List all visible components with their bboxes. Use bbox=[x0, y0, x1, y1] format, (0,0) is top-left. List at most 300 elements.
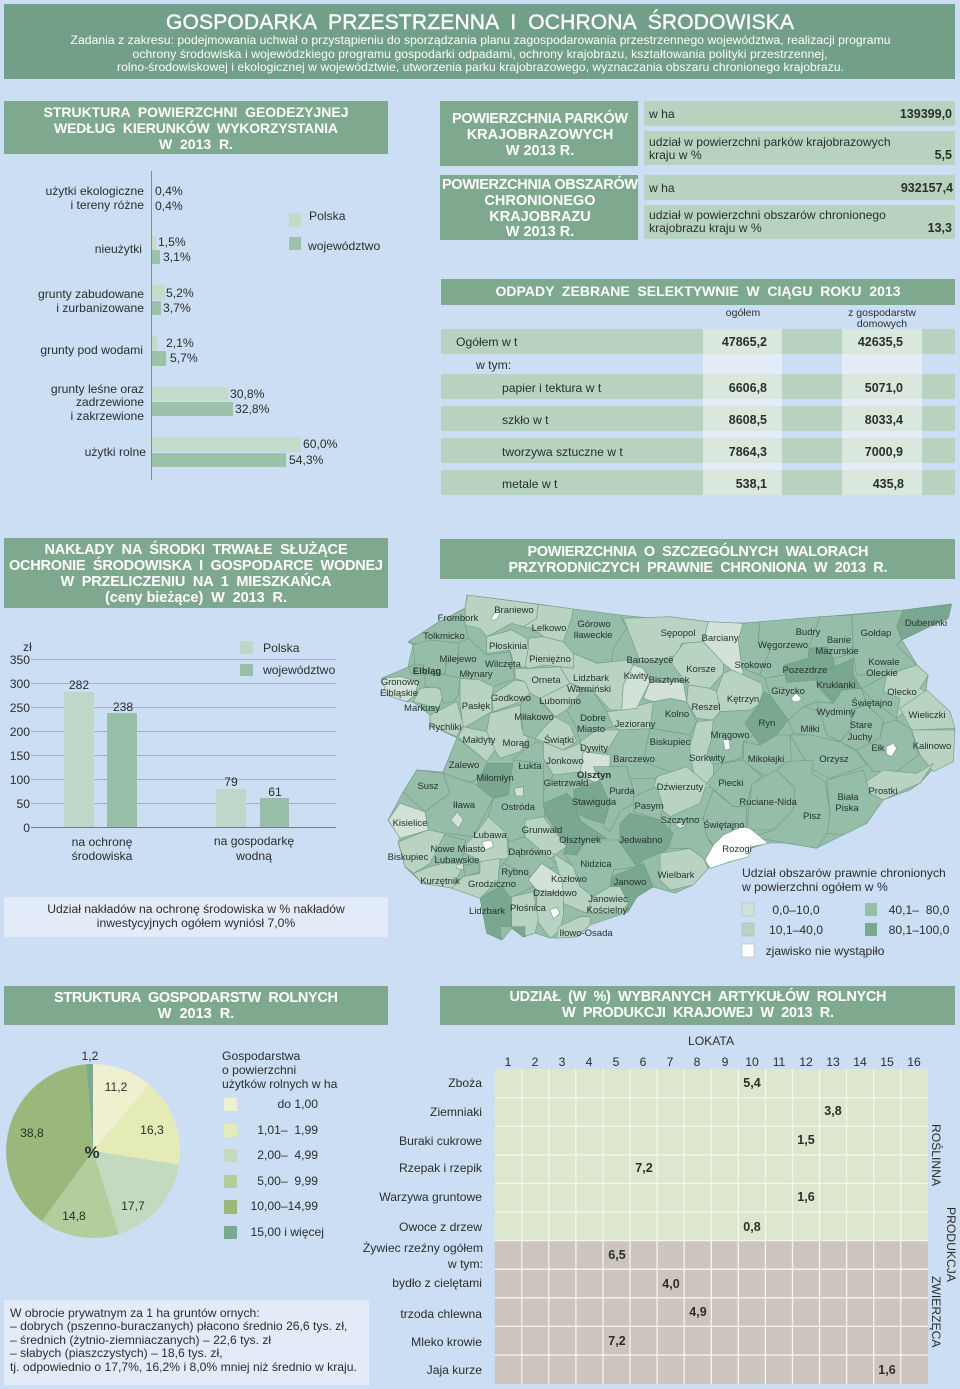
bar chart: outlays per capita: na gospodarkę bbox=[214, 834, 294, 848]
panel: selective waste table: 47865,2 bbox=[722, 335, 767, 349]
panel: landscape parks: w ha bbox=[648, 107, 675, 121]
map place names: Oleckie bbox=[866, 668, 898, 679]
table: rank grid: Warzywa gruntowe bbox=[379, 1190, 482, 1204]
legend: farm sizes: 15,00 i więcej bbox=[250, 1225, 324, 1239]
callout: outlays share: Udział nakładów na ochronę środowiska w % nakładów bbox=[47, 902, 345, 916]
panel: protected landscape areas: 932157,4 bbox=[901, 181, 953, 195]
map place names: Górowo bbox=[577, 619, 611, 630]
bar chart: outlays per capita bbox=[10, 640, 336, 863]
pie chart: farm sizes bbox=[6, 1049, 180, 1238]
table: rank grid: Mleko krowie bbox=[411, 1335, 482, 1349]
map place names: Miłakowo bbox=[514, 712, 554, 723]
map place names: Zalewo bbox=[449, 760, 479, 771]
legend: outlays bbox=[240, 641, 335, 677]
map place names: Grodziczno bbox=[468, 879, 516, 890]
map place names: Giżycko bbox=[771, 686, 805, 697]
map place names: Lidzbark bbox=[469, 906, 505, 917]
intro text bbox=[70, 33, 890, 74]
map place names: Kowale bbox=[868, 657, 900, 668]
bar chart: land structure: i zurbanizowane bbox=[56, 301, 144, 315]
table: rank grid: 13 bbox=[826, 1055, 840, 1069]
legend: farm sizes bbox=[222, 1049, 338, 1239]
panel: selective waste table: Ogółem w t bbox=[456, 335, 518, 349]
legend: protected area share: 10,1–40,0 bbox=[769, 923, 823, 937]
heading: investment outlays: OCHRONIE ŚRODOWISKA I GOSPODARCE WODNEJ bbox=[9, 556, 383, 574]
map place names: Rozogi bbox=[722, 844, 752, 855]
axis label: plant production: ROŚLINNA bbox=[929, 1124, 944, 1187]
map place names: Łukta bbox=[518, 761, 542, 772]
heading: land structure: WEDŁUG KIERUNKÓW WYKORZYSTANIA bbox=[54, 119, 338, 136]
panel: selective waste table: 42635,5 bbox=[858, 335, 903, 349]
map place names: Stawiguda bbox=[572, 797, 617, 808]
map place names: Janowo bbox=[614, 877, 646, 888]
map place names: Dywity bbox=[580, 743, 608, 754]
map place names: Lubawskie bbox=[435, 855, 479, 866]
callout: land prices bbox=[4, 1300, 369, 1385]
map place names: Olsztyn bbox=[577, 770, 611, 781]
table: rank grid: Jaja kurze bbox=[427, 1363, 482, 1377]
panel: selective waste table: tworzywa sztuczne w t bbox=[502, 445, 623, 459]
heading: share of agricultural products: UDZIAŁ (W %) WYBRANYCH ARTYKUŁÓW ROLNYCH bbox=[510, 987, 886, 1005]
map place names: Elbląg bbox=[413, 666, 441, 677]
map place names: Kętrzyn bbox=[727, 694, 759, 705]
map place names: Wieliczki bbox=[909, 710, 945, 721]
heading: land structure: STRUKTURA POWIERZCHNI GEODEZYJNEJ bbox=[44, 104, 348, 120]
heading: share of agricultural products bbox=[440, 986, 955, 1025]
bar chart: outlays per capita: wodną bbox=[235, 849, 272, 863]
map place names: Rybno bbox=[501, 867, 529, 878]
map place names: Janowiec bbox=[588, 894, 628, 905]
bar chart: land structure: użytki rolne bbox=[85, 445, 146, 459]
heading: protected areas map bbox=[440, 539, 955, 579]
table: rank grid: 0,8 bbox=[743, 1220, 761, 1234]
legend: land structure bbox=[289, 209, 380, 253]
table: rank grid: 5 bbox=[613, 1055, 620, 1069]
panel: selective waste table: z gospodarstw bbox=[848, 307, 916, 319]
map place names: Mikołajki bbox=[748, 754, 784, 765]
map place names: Jonkowo bbox=[546, 756, 584, 767]
choropleth map bbox=[380, 595, 955, 940]
map place names: Działdowo bbox=[533, 888, 577, 899]
panel: protected landscape areas: 13,3 bbox=[928, 221, 952, 235]
panel: selective waste table bbox=[441, 279, 955, 495]
table: rank grid: 2 bbox=[532, 1055, 539, 1069]
table: rank grid: 15 bbox=[880, 1055, 894, 1069]
heading: farm structure bbox=[4, 986, 388, 1025]
map place names: Dźwierzuty bbox=[657, 782, 703, 793]
panel: selective waste table: 8033,4 bbox=[865, 413, 903, 427]
heading: farm structure: W 2013 R. bbox=[158, 1006, 234, 1022]
panel: landscape parks bbox=[440, 101, 955, 166]
table: rank grid: w tym: bbox=[447, 1257, 483, 1271]
table: rank grid: 4 bbox=[586, 1055, 593, 1069]
panel: selective waste table: ODPADY ZEBRANE SELEKTYWNIE W CIĄGU ROKU 2013 bbox=[496, 283, 901, 299]
bar chart: outlays per capita: 100 bbox=[10, 773, 30, 787]
map place names: Ostróda bbox=[501, 802, 536, 813]
panel: protected landscape areas: udział w powierzchni obszarów chronionego bbox=[649, 208, 886, 222]
panel: landscape parks: 139399,0 bbox=[900, 107, 952, 121]
heading: protected areas map: PRZYRODNICZYCH PRAWNIE CHRONIONA W 2013 R. bbox=[508, 560, 888, 576]
map place names: Płośnica bbox=[510, 903, 547, 914]
map place names: Susz bbox=[417, 781, 439, 792]
table: rank grid: 6,5 bbox=[608, 1248, 626, 1262]
bar chart: land structure: grunty pod wodami bbox=[40, 343, 143, 357]
map place names: Kruklanki bbox=[816, 680, 856, 691]
panel: selective waste table: ogółem bbox=[726, 307, 760, 319]
map place names: Milejewo bbox=[440, 654, 476, 665]
panel: selective waste table: 8608,5 bbox=[729, 413, 767, 427]
panel: selective waste table: w tym: bbox=[475, 358, 511, 372]
table: rank grid: Buraki cukrowe bbox=[399, 1134, 482, 1148]
panel: landscape parks: 5,5 bbox=[935, 148, 952, 162]
table: rank grid: 16 bbox=[907, 1055, 921, 1069]
heading: farm structure: STRUKTURA GOSPODARSTW ROLNYCH bbox=[54, 990, 338, 1006]
table: rank grid: Rzepak i rzepik bbox=[399, 1161, 483, 1175]
bar chart: outlays per capita: 0 bbox=[23, 821, 30, 835]
map place names: Stare bbox=[850, 720, 872, 731]
map place names: Pozezdrze bbox=[783, 665, 827, 676]
map place names: Dobre bbox=[580, 713, 606, 724]
panel: selective waste table: 7864,3 bbox=[729, 445, 767, 459]
map place names: Dąbrówno bbox=[508, 847, 552, 858]
callout: outlays share: inwestycyjnych ogółem wyniósł 7,0% bbox=[97, 916, 295, 930]
table: rank grid: LOKATA bbox=[688, 1034, 735, 1048]
map place names: Jeziorany bbox=[615, 719, 656, 730]
bar chart: land structure: 5,2% bbox=[166, 286, 194, 300]
bar chart: land structure: 5,7% bbox=[170, 351, 198, 365]
intro text: ochrony środowiska i wojewódzkiego programu gospodarki odpadami, ochrony krajobrazu, kształtowania polityki przestrzennej, bbox=[132, 47, 828, 61]
callout: land prices: W obrocie prywatnym za 1 ha gruntów ornych: bbox=[10, 1306, 260, 1320]
panel: selective waste table: szkło w t bbox=[502, 413, 549, 427]
table: rank grid: 1,6 bbox=[797, 1190, 815, 1204]
map place names: Sorkwity bbox=[689, 753, 725, 764]
title banner bbox=[4, 4, 955, 79]
panel: protected landscape areas: krajobrazu kraju w % bbox=[649, 221, 762, 235]
legend: protected area share bbox=[741, 866, 950, 958]
legend: protected area share: w powierzchni ogółem w % bbox=[741, 880, 888, 894]
panel: selective waste table: 435,8 bbox=[873, 477, 904, 491]
table: rank grid: Ziemniaki bbox=[430, 1105, 482, 1119]
legend: protected area share: 80,1–100,0 bbox=[889, 923, 950, 937]
legend: farm sizes: Gospodarstwa bbox=[222, 1049, 301, 1063]
map place names: Nidzica bbox=[580, 859, 612, 870]
axis label: production: PRODUKCJA bbox=[944, 1207, 958, 1283]
title: GOSPODARKA PRZESTRZENNA I OCHRONA ŚRODOWISKA bbox=[166, 10, 794, 34]
panel: selective waste table: 7000,9 bbox=[865, 445, 903, 459]
panel: protected landscape areas: POWIERZCHNIA OBSZARÓW bbox=[442, 175, 638, 193]
legend: protected area share: Udział obszarów prawnie chronionych bbox=[742, 866, 946, 880]
bar chart: outlays per capita: 61 bbox=[268, 785, 282, 799]
map place names: Budry bbox=[796, 627, 821, 638]
map place names: Purda bbox=[609, 786, 635, 797]
map place names: Tolkmicko bbox=[423, 631, 465, 642]
legend: land structure: Polska bbox=[309, 209, 346, 223]
map place names: Reszel bbox=[691, 702, 721, 713]
pie chart: farm sizes: 38,8 bbox=[20, 1126, 44, 1140]
map place names: Miłomłyn bbox=[476, 773, 514, 784]
panel: selective waste table: 538,1 bbox=[736, 477, 767, 491]
table: rank grid: 7 bbox=[667, 1055, 674, 1069]
map place names: Barczewo bbox=[613, 754, 655, 765]
panel: protected landscape areas: w ha bbox=[648, 181, 675, 195]
bar chart: outlays per capita: 150 bbox=[10, 749, 30, 763]
pie chart: farm sizes: 14,8 bbox=[62, 1209, 86, 1223]
table: rank grid: 12 bbox=[799, 1055, 813, 1069]
map place names: Młynary bbox=[459, 669, 493, 680]
map place names: Lelkowo bbox=[532, 623, 566, 634]
table: rank grid: 1 bbox=[505, 1055, 512, 1069]
pie chart: farm sizes: 1,2 bbox=[82, 1049, 99, 1063]
panel: landscape parks: KRAJOBRAZOWYCH bbox=[467, 127, 613, 143]
map place names: Kościelny bbox=[587, 905, 628, 916]
map place names: Iława bbox=[453, 800, 476, 811]
map place names: Olecko bbox=[887, 687, 917, 698]
map place names bbox=[380, 605, 951, 939]
map place names: Świętajno bbox=[703, 819, 745, 831]
heading: investment outlays bbox=[4, 538, 388, 608]
axis label: animal production: ZWIERZĘCA bbox=[929, 1276, 943, 1348]
heading: land structure: W 2013 R. bbox=[159, 136, 233, 152]
bar chart: land structure: i tereny różne bbox=[70, 198, 144, 212]
intro text: rolno-środowiskowej i ekologicznej w województwie, utworzenia parku krajobrazowego, wyznaczania obszaru chronionego krajobrazu. bbox=[117, 60, 844, 74]
map place names: Piska bbox=[835, 803, 859, 814]
legend: farm sizes: 5,00– 9,99 bbox=[257, 1174, 318, 1188]
map place names: Mazurskie bbox=[815, 646, 859, 657]
map place names: Korsze bbox=[686, 664, 716, 675]
pie chart: farm sizes: 11,2 bbox=[105, 1080, 128, 1094]
bar chart: land structure: i zakrzewione bbox=[70, 409, 144, 423]
map place names: Gronowo bbox=[381, 677, 419, 688]
map place names: Lidzbark bbox=[573, 673, 609, 684]
bar chart: land structure: grunty zabudowane bbox=[38, 287, 144, 301]
map place names: Biskupiec bbox=[650, 737, 691, 748]
map place names: Świętajno bbox=[851, 697, 893, 709]
legend: farm sizes: 1,01– 1,99 bbox=[257, 1123, 318, 1137]
bar chart: land structure: 0,4% bbox=[155, 199, 183, 213]
panel: protected landscape areas: W 2013 R. bbox=[506, 224, 574, 240]
map place names: Kiwity bbox=[624, 671, 649, 682]
map place names: Kolno bbox=[665, 709, 689, 720]
legend: outlays: Polska bbox=[263, 641, 300, 655]
table: rank grid: 4,0 bbox=[662, 1277, 680, 1291]
bar chart: outlays per capita: 250 bbox=[10, 701, 30, 715]
map place names: Godkowo bbox=[491, 693, 531, 704]
bar chart: outlays per capita: na ochronę bbox=[72, 835, 133, 849]
heading: share of agricultural products: W PRODUKCJI KRAJOWEJ W 2013 R. bbox=[562, 1005, 834, 1021]
legend: protected area share: zjawisko nie wystąpiło bbox=[766, 944, 885, 958]
table: rank grid: 4,9 bbox=[689, 1305, 707, 1319]
map place names: Elbląskie bbox=[380, 688, 418, 699]
bar chart: land structure: nieużytki bbox=[95, 242, 142, 256]
bar chart: outlays per capita: 79 bbox=[224, 775, 238, 789]
map place names: Ełk bbox=[871, 743, 885, 754]
table: rank grid bbox=[363, 1034, 928, 1384]
table: rank grid: 11 bbox=[773, 1055, 786, 1069]
panel: selective waste table: 5071,0 bbox=[865, 381, 903, 395]
heading: investment outlays: W PRZELICZENIU NA 1 MIESZKAŃCA bbox=[60, 573, 332, 590]
map place names: Orneta bbox=[531, 675, 561, 686]
map place names: Sępopol bbox=[661, 628, 695, 639]
map place names: Pasym bbox=[634, 801, 664, 812]
map place names: Piecki bbox=[718, 778, 744, 789]
bar chart: land structure: 54,3% bbox=[289, 453, 324, 467]
table: rank grid: Zboża bbox=[448, 1076, 482, 1090]
table: rank grid: 9 bbox=[722, 1055, 729, 1069]
map place names: Iłowo-Osada bbox=[559, 928, 613, 939]
heading: investment outlays: NAKŁADY NA ŚRODKI TRWAŁE SŁUŻĄCE bbox=[44, 540, 348, 558]
panel: landscape parks: W 2013 R. bbox=[506, 143, 574, 159]
map place names: Iławeckie bbox=[573, 630, 613, 641]
table: rank grid: 8 bbox=[694, 1055, 701, 1069]
callout: land prices: – słabych (piaszczystych) – 18,6 tys. zł, bbox=[10, 1346, 223, 1360]
map place names: Kisielice bbox=[393, 818, 427, 829]
map place names: Ruciane-Nida bbox=[739, 797, 797, 808]
table: rank grid: 10 bbox=[745, 1055, 759, 1069]
map place names: Morąg bbox=[503, 738, 529, 749]
map place names: Lubomino bbox=[539, 696, 581, 707]
heading: protected areas map: POWIERZCHNIA O SZCZEGÓLNYCH WALORACH bbox=[528, 542, 868, 560]
map place names: Braniewo bbox=[494, 605, 534, 616]
legend: farm sizes: 10,00–14,99 bbox=[250, 1199, 318, 1213]
map place names: Frombork bbox=[438, 613, 479, 624]
table: rank grid: 3,8 bbox=[824, 1104, 842, 1118]
map place names: Gołdap bbox=[861, 628, 891, 639]
map place names: Barciany bbox=[702, 633, 739, 644]
legend: farm sizes: 2,00– 4,99 bbox=[257, 1148, 318, 1162]
bar chart: land structure: grunty leśne oraz bbox=[51, 382, 144, 396]
table: rank grid: trzoda chlewna bbox=[400, 1307, 482, 1321]
map place names: Świątki bbox=[544, 734, 574, 746]
map place names: Srokowo bbox=[735, 660, 771, 671]
bar chart: outlays per capita: 350 bbox=[10, 653, 30, 667]
map place names: Szczytno bbox=[661, 815, 699, 826]
map place names: Pasłęk bbox=[462, 701, 491, 712]
panel: protected landscape areas: CHRONIONEGO bbox=[484, 193, 596, 209]
map place names: Biskupiec bbox=[388, 852, 429, 863]
map place names: Dubeninki bbox=[905, 618, 947, 629]
bar chart: land structure: 3,7% bbox=[163, 301, 191, 315]
table: rank grid: 7,2 bbox=[608, 1334, 626, 1348]
legend: protected area share: 0,0–10,0 bbox=[772, 903, 820, 917]
callout: land prices: – średnich (żytnio-ziemniaczanych) – 22,6 tys. zł bbox=[10, 1333, 271, 1347]
panel: landscape parks: udział w powierzchni parków krajobrazowych bbox=[649, 135, 891, 149]
map place names: Miłki bbox=[800, 724, 820, 735]
table: rank grid: bydło z cielętami bbox=[392, 1276, 482, 1290]
map place names: Płoskinia bbox=[489, 641, 528, 652]
map place names: Pisz bbox=[803, 811, 821, 822]
heading: investment outlays: (ceny bieżące) W 2013 R. bbox=[105, 590, 287, 606]
map place names: Rychliki bbox=[429, 722, 461, 733]
table: rank grid: Owoce z drzew bbox=[399, 1220, 482, 1234]
bar chart: land structure: użytki ekologiczne bbox=[45, 184, 144, 198]
map place names: Mrągowo bbox=[710, 730, 750, 741]
map place names: Miasto bbox=[577, 724, 605, 735]
bar chart: outlays per capita: 238 bbox=[113, 700, 133, 714]
map place names: Pieniężno bbox=[529, 654, 571, 665]
map place names: Węgorzewo bbox=[758, 640, 808, 651]
map place names: Kurzętnik bbox=[420, 876, 460, 887]
map place names: Kozłowo bbox=[551, 874, 587, 885]
legend: farm sizes: do 1,00 bbox=[277, 1097, 318, 1111]
map place names: Bisztynek bbox=[649, 675, 690, 686]
map place names: Jedwabno bbox=[619, 835, 663, 846]
panel: protected landscape areas bbox=[440, 175, 955, 240]
callout: outlays share bbox=[4, 897, 388, 937]
map place names: Warmiński bbox=[567, 684, 611, 695]
legend: protected area share: 40,1– 80,0 bbox=[889, 903, 950, 917]
map place names: Nowe Miasto bbox=[431, 844, 485, 855]
bar chart: outlays per capita: 282 bbox=[69, 678, 89, 692]
bar chart: outlays per capita: środowiska bbox=[72, 849, 133, 863]
callout: land prices: – dobrych (pszenno-buraczanych) płacono średnio 26,6 tys. zł, bbox=[10, 1319, 347, 1333]
map place names: Gietrzwałd bbox=[544, 778, 588, 789]
pie chart: farm sizes: % bbox=[84, 1143, 100, 1162]
map place names: Lubawa bbox=[473, 830, 507, 841]
map place names: Orzysz bbox=[819, 754, 849, 765]
map place names: Juchy bbox=[848, 732, 873, 743]
bar chart: land structure: zadrzewione bbox=[76, 395, 144, 409]
map place names: Wydminy bbox=[817, 707, 856, 718]
map place names: Małdyty bbox=[463, 735, 496, 746]
map place names: Olsztynek bbox=[559, 835, 601, 846]
bar chart: outlays per capita: zł bbox=[23, 640, 32, 654]
bar chart: land structure: 3,1% bbox=[163, 250, 191, 264]
intro text: Zadania z zakresu: podejmowania uchwał o przystąpieniu do sporządzania planu zagospodarowania przestrzennego województwa, realizacji programu bbox=[70, 33, 890, 47]
table: rank grid: 5,4 bbox=[743, 1076, 761, 1090]
callout: land prices: tj. odpowiednio o 17,7%, 16,2% i 8,0% mniej niż średnio w kraju. bbox=[10, 1360, 357, 1374]
pie chart: farm sizes: 16,3 bbox=[140, 1123, 164, 1137]
legend: farm sizes: użytków rolnych w ha bbox=[222, 1077, 338, 1091]
panel: selective waste table: papier i tektura w t bbox=[502, 381, 602, 395]
heading: land structure bbox=[4, 101, 388, 154]
legend: land structure: województwo bbox=[307, 239, 380, 253]
legend: outlays: województwo bbox=[262, 663, 335, 677]
pie chart: farm sizes: 17,7 bbox=[121, 1199, 145, 1213]
bar chart: land structure bbox=[38, 171, 338, 480]
table: rank grid: 1,6 bbox=[878, 1363, 896, 1377]
bar chart: land structure: 1,5% bbox=[158, 235, 186, 249]
legend: farm sizes: o powierzchni bbox=[222, 1063, 296, 1077]
panel: landscape parks: kraju w % bbox=[649, 148, 702, 162]
map place names: Kalinowo bbox=[913, 741, 951, 752]
table: rank grid: 14 bbox=[853, 1055, 867, 1069]
table: rank grid: 6 bbox=[640, 1055, 647, 1069]
map place names: Markusy bbox=[404, 703, 440, 714]
bar chart: outlays per capita: 300 bbox=[10, 677, 30, 691]
panel: selective waste table: metale w t bbox=[502, 477, 558, 491]
bar chart: land structure: 2,1% bbox=[166, 336, 194, 350]
map place names: Banie bbox=[827, 635, 851, 646]
map place names: Biała bbox=[837, 792, 859, 803]
panel: selective waste table: 6606,8 bbox=[729, 381, 767, 395]
map place names: Wielbark bbox=[658, 870, 695, 881]
bar chart: land structure: 0,4% bbox=[155, 184, 183, 198]
table: rank grid: Żywiec rzeźny ogółem bbox=[363, 1241, 483, 1255]
map place names: Bartoszyce bbox=[626, 655, 674, 666]
table: rank grid: 3 bbox=[559, 1055, 566, 1069]
panel: selective waste table: domowych bbox=[857, 318, 907, 330]
map place names: Prostki bbox=[868, 786, 898, 797]
table: rank grid: 1,5 bbox=[797, 1133, 815, 1147]
bar chart: land structure: 30,8% bbox=[230, 387, 265, 401]
bar chart: outlays per capita: 50 bbox=[16, 797, 30, 811]
map place names: Wilczęta bbox=[485, 659, 522, 670]
bar chart: land structure: 32,8% bbox=[235, 402, 270, 416]
map place names: Grunwald bbox=[522, 825, 562, 836]
table: rank grid: 7,2 bbox=[635, 1161, 653, 1175]
map place names: Ryn bbox=[759, 718, 775, 729]
bar chart: outlays per capita: 200 bbox=[10, 725, 30, 739]
